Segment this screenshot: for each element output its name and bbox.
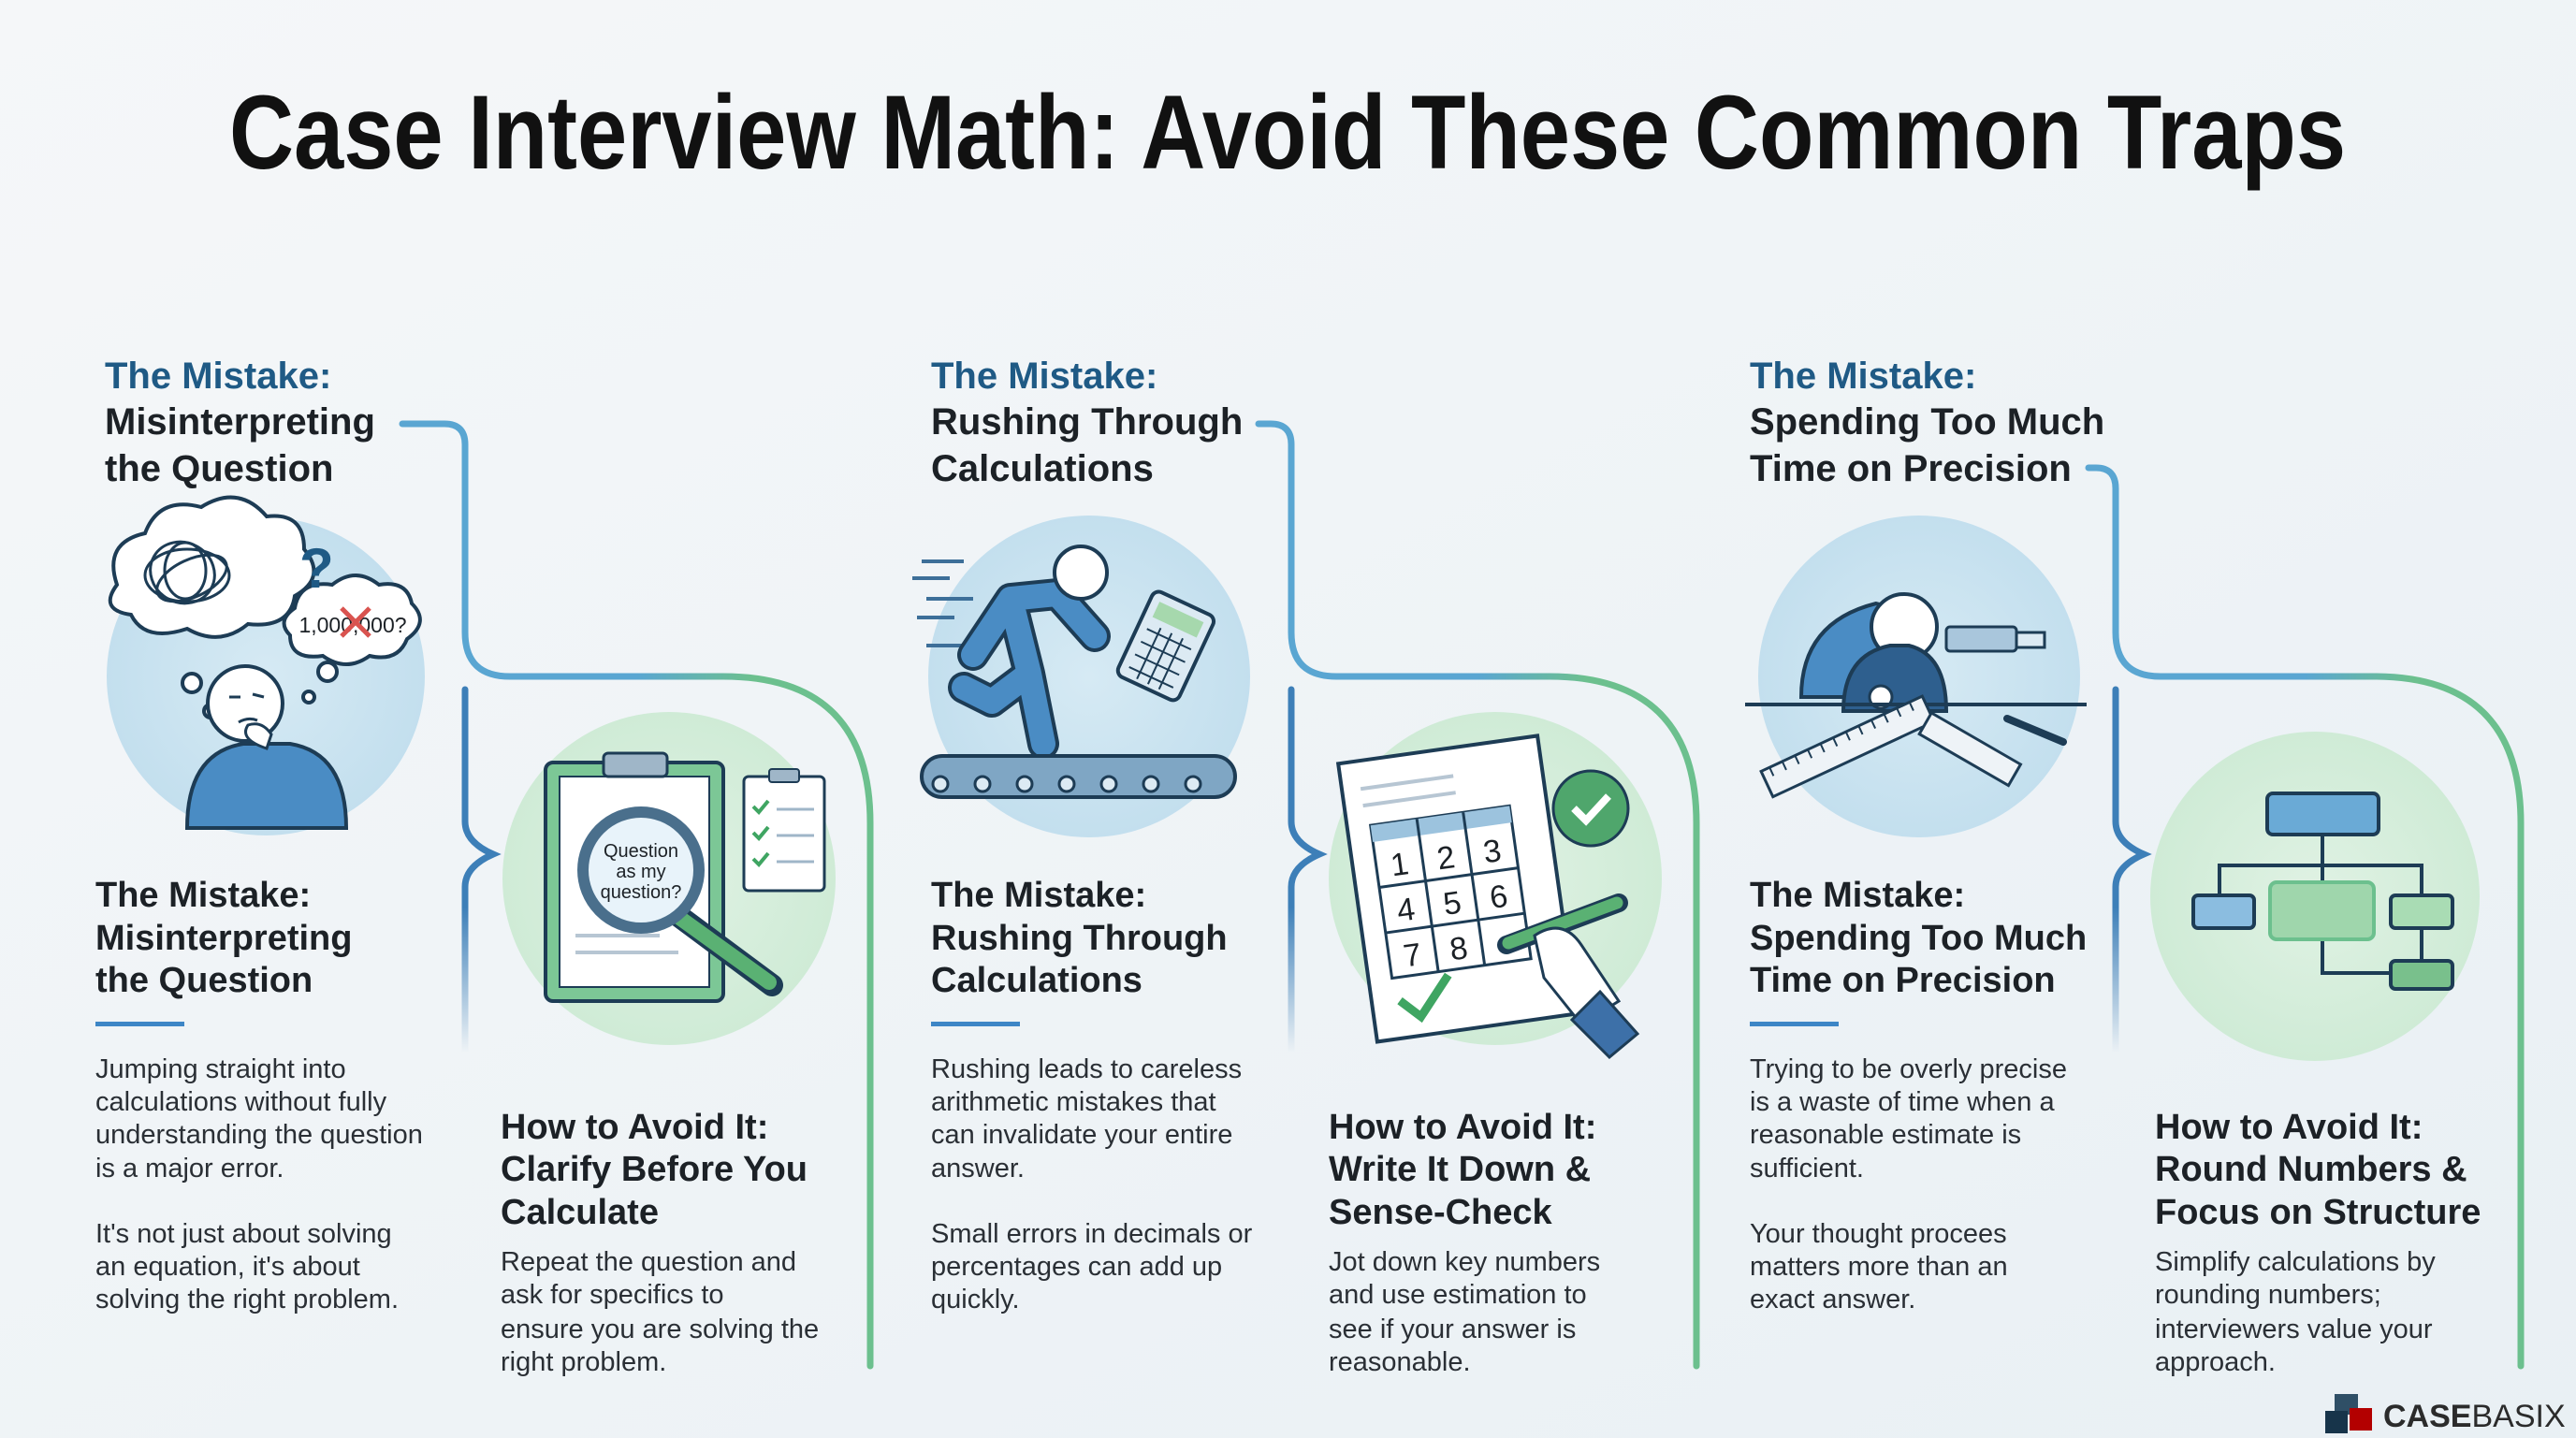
panel: column 3 mistake heading (top): Time on Precision bbox=[1750, 448, 2072, 489]
icon: worksheet with checks: 7 bbox=[1401, 937, 1423, 974]
text: column 2 mistake: can invalidate your entire bbox=[931, 1120, 1232, 1150]
icon: worksheet with checks bbox=[1329, 712, 1662, 1057]
text: column 2 mistake: arithmetic mistakes that bbox=[931, 1087, 1216, 1117]
panel: column 3 mistake heading (top): Spending Too Much bbox=[1750, 401, 2104, 443]
text: column 1 mistake: It's not just about solving bbox=[95, 1219, 392, 1249]
text: column 2 how to avoid: see if your answer is bbox=[1329, 1315, 1576, 1344]
text: column 3 mistake: exact answer. bbox=[1750, 1285, 1915, 1315]
text: column 3 how to avoid: rounding numbers; bbox=[2155, 1280, 2381, 1310]
text: column 3 mistake: Time on Precision bbox=[1750, 961, 2056, 1000]
icon: worksheet with checks: 6 bbox=[1488, 879, 1510, 916]
text: column 2 mistake: Calculations bbox=[931, 961, 1142, 1000]
text: column 2 mistake: The Mistake: bbox=[931, 876, 1146, 915]
text: column 3 how to avoid: How to Avoid It: bbox=[2155, 1108, 2423, 1147]
panel: column 2 mistake heading (top): Rushing Through bbox=[931, 401, 1243, 443]
text: column 3 mistake: reasonable estimate is bbox=[1750, 1120, 2021, 1150]
icon: clipboard with magnifier bbox=[502, 712, 836, 1045]
text: column 3 how to avoid: Simplify calculations by bbox=[2155, 1247, 2436, 1277]
panel: column 1 mistake heading (top): the Question bbox=[105, 448, 333, 489]
text: column 3 how to avoid: Focus on Structure bbox=[2155, 1193, 2481, 1232]
text: column 1 mistake: an equation, it's about bbox=[95, 1252, 360, 1282]
icon: clipboard with magnifier: as my bbox=[616, 862, 666, 882]
panel: column 3 mistake heading (top): The Mistake: bbox=[1750, 356, 1976, 397]
text: column 3 how to avoid: Round Numbers & bbox=[2155, 1150, 2467, 1189]
text: column 3 how to avoid bbox=[2155, 1108, 2481, 1377]
text: column 1 mistake: The Mistake: bbox=[95, 876, 311, 915]
logo: casebasix bbox=[2325, 1394, 2566, 1434]
text: column 1 mistake: the Question bbox=[95, 961, 313, 1000]
icon: worksheet with checks: 5 bbox=[1441, 885, 1463, 922]
connector: column 2 bbox=[1259, 424, 1696, 1366]
icon: worksheet with checks: 2 bbox=[1434, 839, 1457, 877]
icon: person with microscope and rulers bbox=[1745, 516, 2087, 837]
icon: clipboard with magnifier: question? bbox=[601, 882, 681, 903]
text: column 1 how to avoid bbox=[501, 1108, 819, 1377]
text: column 1 how to avoid: Repeat the question and bbox=[501, 1247, 796, 1277]
icon: clipboard with magnifier: Question bbox=[604, 841, 678, 862]
panel: column 1 mistake heading (top) bbox=[105, 356, 375, 489]
text: column 2 mistake bbox=[931, 876, 1253, 1315]
text: column 1 how to avoid: ensure you are solving the bbox=[501, 1315, 819, 1344]
text: column 2 mistake: Rushing Through bbox=[931, 919, 1228, 958]
panel: column 2 mistake heading (top): The Mistake: bbox=[931, 356, 1157, 397]
text: column 1 mistake: solving the right problem. bbox=[95, 1285, 399, 1315]
text: column 1 how to avoid: Clarify Before You bbox=[501, 1150, 808, 1189]
text: column 2 how to avoid: and use estimation to bbox=[1329, 1280, 1587, 1310]
text: column 2 how to avoid: reasonable. bbox=[1329, 1347, 1471, 1377]
icon: confused thinker: ? bbox=[299, 537, 334, 600]
text: column 1 mistake: Misinterpreting bbox=[95, 919, 352, 958]
text: column 2 how to avoid: How to Avoid It: bbox=[1329, 1108, 1596, 1147]
text: column 2 how to avoid: Jot down key numbers bbox=[1329, 1247, 1600, 1277]
text: column 1 mistake: is a major error. bbox=[95, 1154, 284, 1184]
text: column 3 mistake: Spending Too Much bbox=[1750, 919, 2087, 958]
connector: column 3 bbox=[2088, 468, 2521, 1366]
panel: column 2 mistake heading (top) bbox=[931, 356, 1243, 489]
icon: worksheet with checks: 8 bbox=[1448, 930, 1470, 967]
logo: casebasix: CASEBASIX bbox=[2383, 1399, 2566, 1434]
text: column 1 how to avoid: Calculate bbox=[501, 1193, 659, 1232]
text: column 1 mistake: calculations without fully bbox=[95, 1087, 387, 1117]
text: column 2 how to avoid bbox=[1329, 1108, 1600, 1377]
text: column 2 mistake: Small errors in decimals or bbox=[931, 1219, 1253, 1249]
text: column 3 mistake: sufficient. bbox=[1750, 1154, 1864, 1184]
text: column 1 how to avoid: How to Avoid It: bbox=[501, 1108, 768, 1147]
icon: worksheet with checks: 4 bbox=[1395, 892, 1418, 929]
text: column 1 how to avoid: right problem. bbox=[501, 1347, 666, 1377]
text: column 1 mistake bbox=[95, 876, 423, 1315]
text: column 1 mistake: Jumping straight into bbox=[95, 1054, 346, 1084]
text: column 3 how to avoid: interviewers value your bbox=[2155, 1315, 2433, 1344]
text: column 3 mistake: Your thought procees bbox=[1750, 1219, 2007, 1249]
icon: worksheet with checks: 1 bbox=[1389, 846, 1411, 883]
icon: worksheet with checks: 3 bbox=[1481, 833, 1504, 870]
icon: confused thinker bbox=[107, 498, 425, 835]
connector: column 1 bbox=[402, 424, 870, 1366]
text: column 1 how to avoid: ask for specifics to bbox=[501, 1280, 724, 1310]
panel: column 3 mistake heading (top) bbox=[1750, 356, 2104, 489]
text: column 2 mistake: quickly. bbox=[931, 1285, 1020, 1315]
text: column 3 mistake: The Mistake: bbox=[1750, 876, 1965, 915]
panel: column 1 mistake heading (top): Misinterpreting bbox=[105, 401, 375, 443]
text: column 3 mistake: is a waste of time when a bbox=[1750, 1087, 2055, 1117]
text: column 2 how to avoid: Write It Down & bbox=[1329, 1150, 1591, 1189]
text: column 2 mistake: answer. bbox=[931, 1154, 1025, 1184]
text: column 2 how to avoid: Sense-Check bbox=[1329, 1193, 1553, 1232]
text: column 1 mistake: understanding the question bbox=[95, 1120, 423, 1150]
text: column 3 mistake bbox=[1750, 876, 2087, 1315]
icon: structure org chart bbox=[2150, 732, 2480, 1061]
text: column 3 mistake: Trying to be overly precise bbox=[1750, 1054, 2067, 1084]
panel: column 2 mistake heading (top): Calculations bbox=[931, 448, 1154, 489]
icon: confused thinker: 1,000,000? bbox=[298, 613, 407, 637]
text: column 3 mistake: matters more than an bbox=[1750, 1252, 2008, 1282]
text: column 2 mistake: percentages can add up bbox=[931, 1252, 1222, 1282]
text: column 2 mistake: Rushing leads to careless bbox=[931, 1054, 1242, 1084]
panel: column 1 mistake heading (top): The Mistake: bbox=[105, 356, 331, 397]
text: column 3 how to avoid: approach. bbox=[2155, 1347, 2276, 1377]
icon: runner on treadmill bbox=[912, 516, 1250, 837]
